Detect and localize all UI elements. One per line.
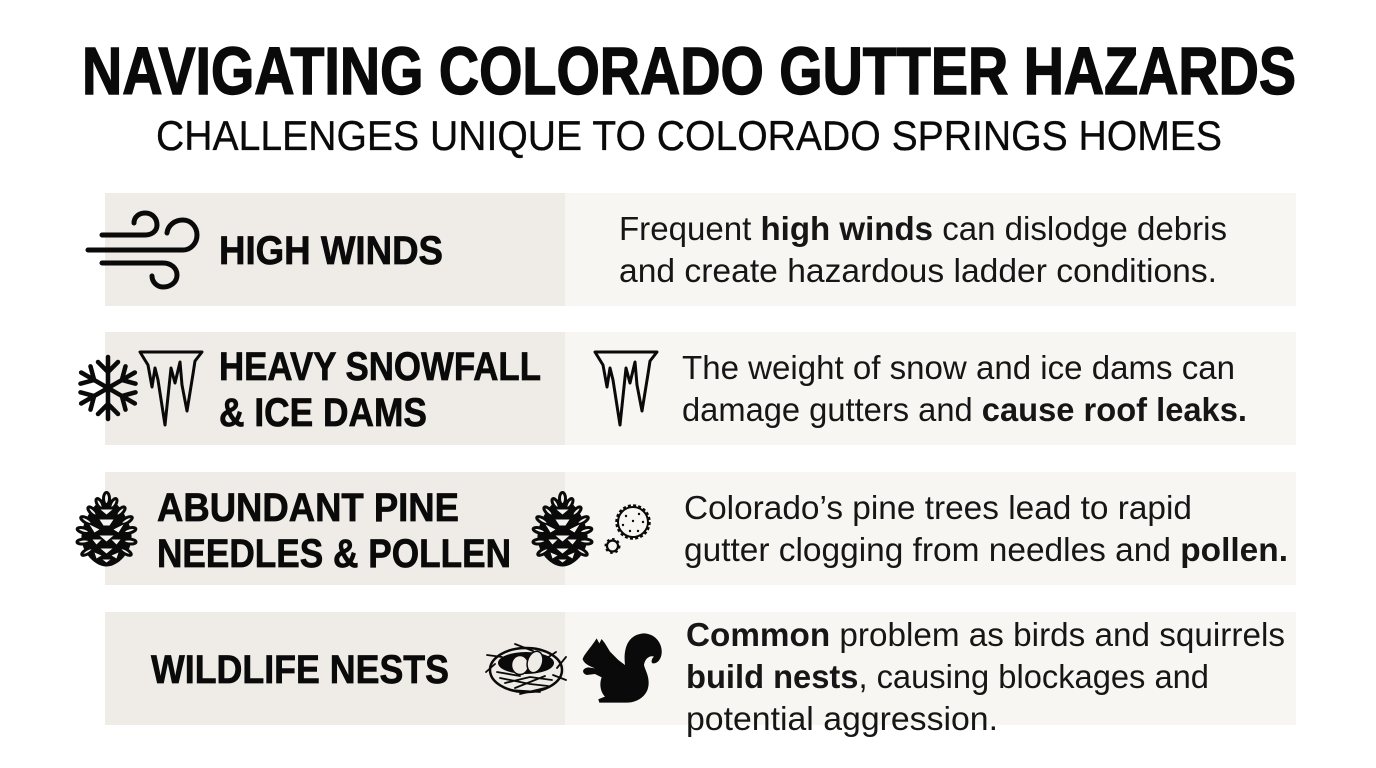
text: pine description <box>684 489 1288 568</box>
text: snowfall description: damage gutters and cause roof leaks. <box>682 391 1247 428</box>
icon: nest <box>486 644 566 694</box>
text: pine description: gutter clogging from needles and pollen. <box>684 531 1288 568</box>
text: wildlife description <box>686 616 1285 737</box>
text: snowfall description <box>682 349 1247 428</box>
icon: icicle right <box>595 352 657 425</box>
text: high winds description <box>619 210 1227 289</box>
icon: pine cone left <box>77 492 136 566</box>
icon: wind <box>88 213 197 287</box>
text: pine description: Colorado’s pine trees lead to rapid <box>684 489 1192 526</box>
text: high winds description: and create hazardous ladder conditions. <box>619 252 1217 289</box>
icon: squirrel <box>583 633 662 703</box>
panel: heavy snowfall and ice dams <box>76 332 1296 445</box>
icon: icicle left <box>140 352 202 425</box>
heading: heavy snowfall: & ICE DAMS <box>219 391 427 435</box>
icon: pine cone right <box>533 492 592 566</box>
icon: snowflake <box>76 357 140 419</box>
text: wildlife description: Common problem as birds and squirrels <box>686 616 1285 653</box>
panel: pine needles and pollen <box>77 472 1296 585</box>
text: wildlife description: potential aggression. <box>686 700 998 737</box>
text: snowfall description: The weight of snow and ice dams can <box>682 349 1235 386</box>
heading: pine needles: NEEDLES & POLLEN <box>157 532 511 576</box>
heading: pine needles: ABUNDANT PINE <box>157 486 459 530</box>
panel: high winds <box>88 193 1296 306</box>
text: high winds description: Frequent high winds can dislodge debris <box>619 210 1227 247</box>
panel: wildlife nests <box>105 612 1296 737</box>
heading: wildlife nests: WILDLIFE NESTS <box>151 648 449 692</box>
heading: high winds: HIGH WINDS <box>219 229 443 273</box>
subtitle: CHALLENGES UNIQUE TO COLORADO SPRINGS HOMES <box>156 112 1222 159</box>
heading: pine needles <box>157 486 511 576</box>
text: wildlife description: build nests, causing blockages and <box>686 658 1209 695</box>
icon: pollen <box>606 506 650 553</box>
heading: heavy snowfall: HEAVY SNOWFALL <box>219 345 541 389</box>
heading: heavy snowfall <box>219 345 541 435</box>
